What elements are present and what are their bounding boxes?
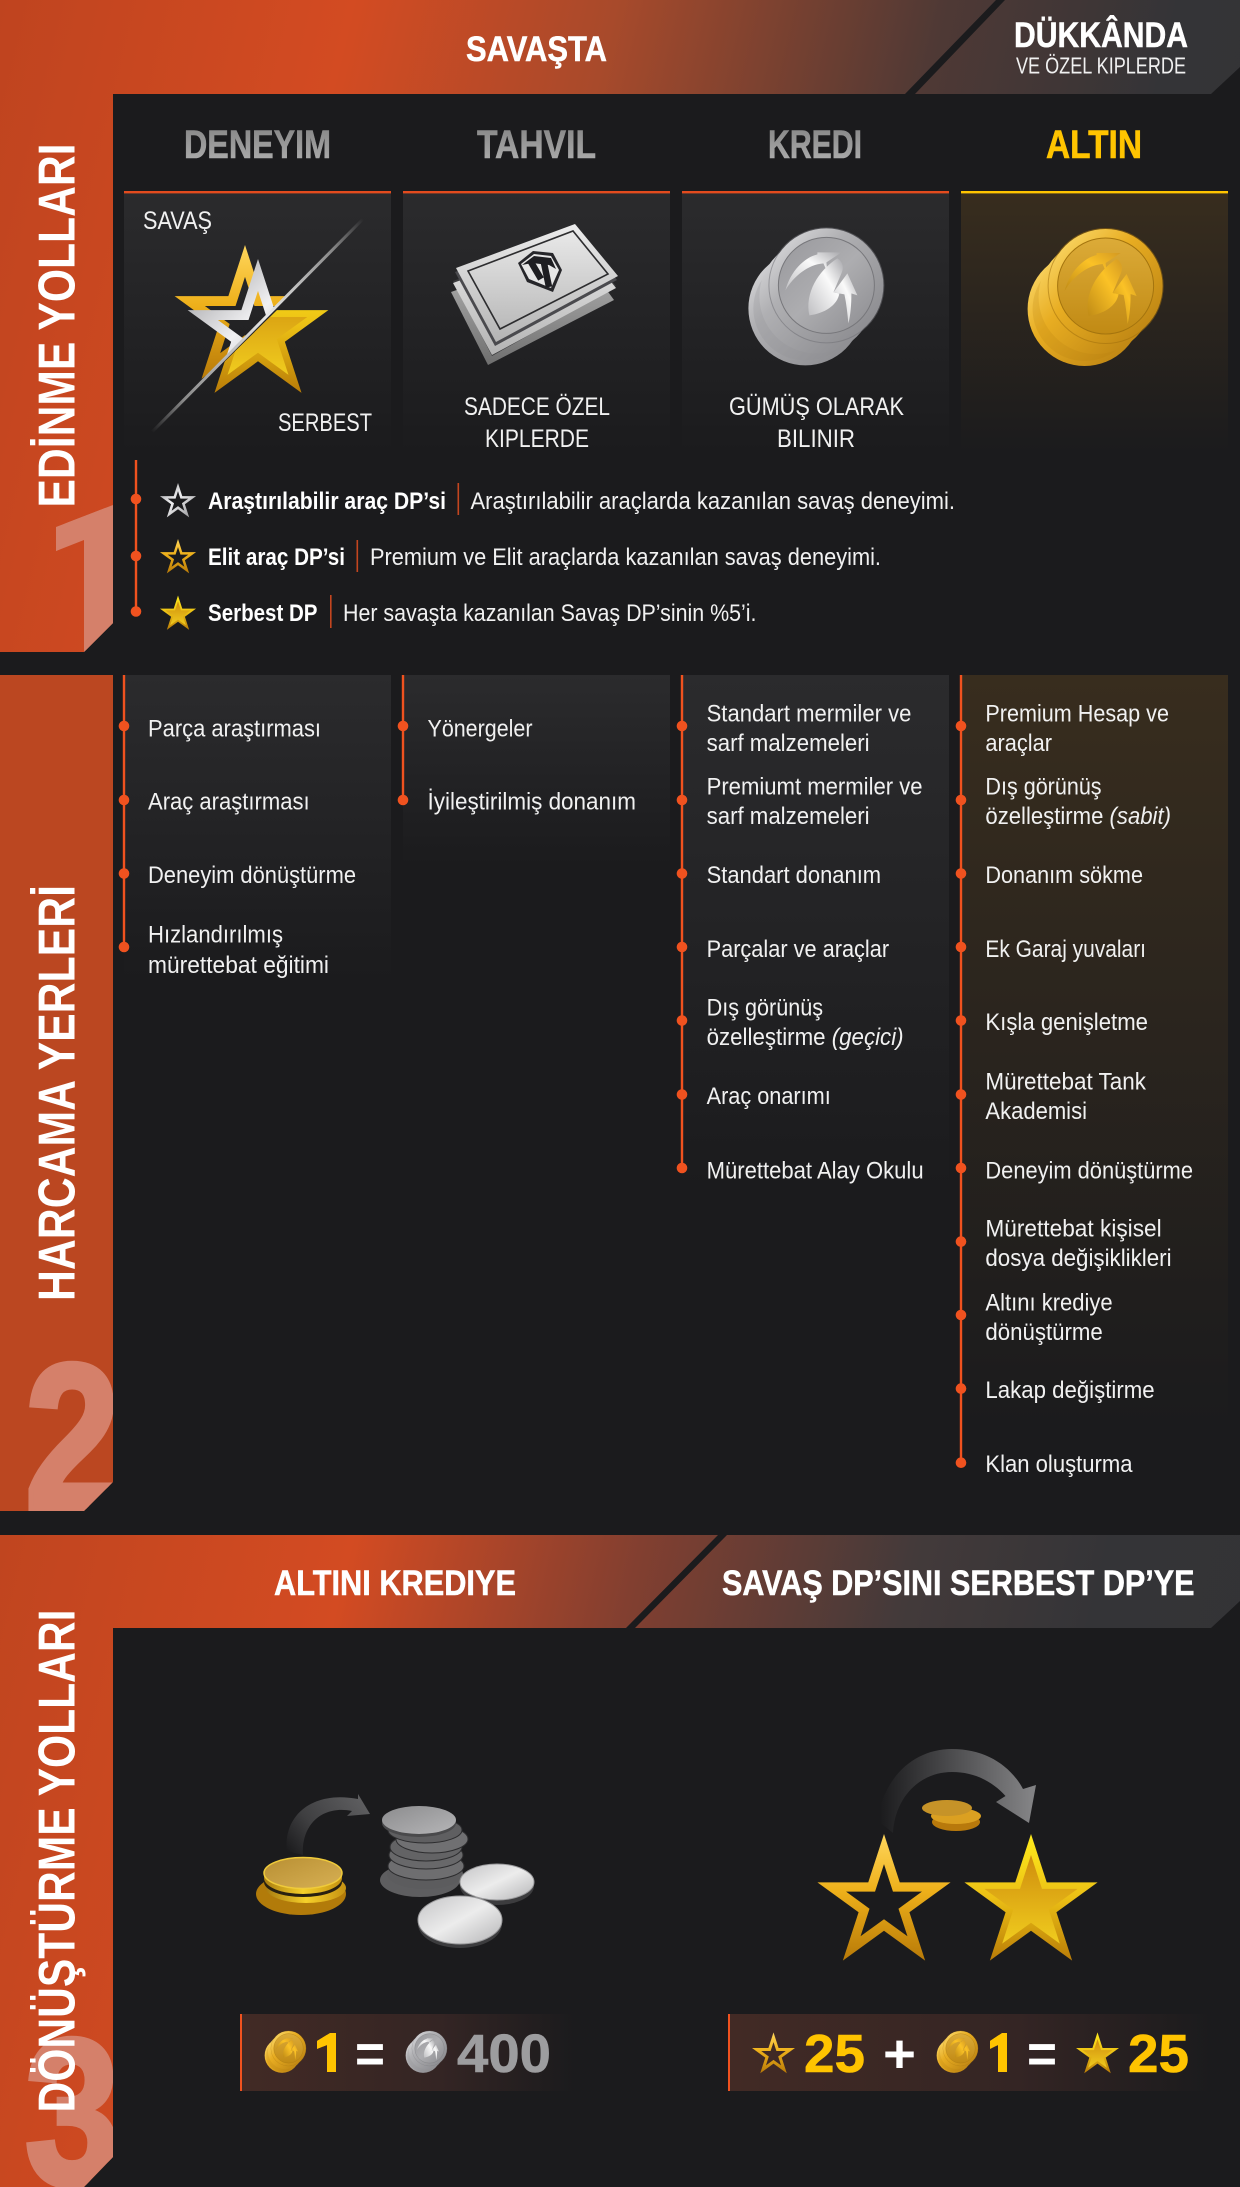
- spending list: altın: Altını krediye: [985, 1290, 1113, 1317]
- spending list: kredi: Mürettebat Alay Okulu: [707, 1158, 924, 1185]
- heading: altını krediye: ALTINI KREDIYE: [274, 1564, 516, 1603]
- formula: 25 xp plus 1 gold equals 25 free xp: =: [1027, 2024, 1057, 2084]
- icon: outline star: [752, 2032, 795, 2073]
- icon: gold outline star: [160, 539, 196, 573]
- section 2: harcama yerleri: [0, 675, 1228, 1554]
- spending list: deneyim: Parça araştırması: [148, 716, 321, 742]
- formula: 25 xp plus 1 gold equals 25 free xp: 25: [804, 2024, 865, 2084]
- heading: dükkânda: DÜKKÂNDA: [1014, 15, 1188, 55]
- section 3: dönüştürme yolları: [0, 1535, 1240, 2187]
- icon: filled star: [1076, 2032, 1119, 2073]
- column heading: kredi: KREDI: [768, 123, 862, 167]
- spending list: altın: Klan oluşturma: [985, 1451, 1133, 1478]
- banner: savaş dp section: [635, 1535, 1240, 1628]
- label: gümüş olarak bilinir: BILINIR: [777, 425, 855, 453]
- legend: experience types: [131, 460, 955, 630]
- legend row 2 description: Premium ve Elit araçlarda kazanılan savaş deneyimi.: [370, 544, 881, 571]
- icon: savaş and serbest star: [152, 219, 363, 432]
- formula: 25 xp plus 1 gold equals 25 free xp: +: [883, 2024, 916, 2084]
- icon: gold coins: [1028, 228, 1164, 366]
- panel: altın: [961, 191, 1228, 452]
- spending list: deneyim: Araç araştırması: [148, 788, 310, 816]
- icon: gold coin: [265, 2031, 306, 2073]
- icon: filled star: [160, 596, 196, 630]
- legend row 3 label: Serbest DP: [208, 600, 318, 627]
- gold coins: [922, 1800, 981, 1831]
- legend row 2 label: Elit araç DP’si: [208, 544, 345, 571]
- label: savaş: SAVAŞ: [143, 207, 212, 235]
- icon: bonds stack: [451, 224, 618, 365]
- formula: 1 gold equals 400 credits: 400: [457, 2024, 551, 2084]
- illustration: gold to silver: [256, 1794, 534, 1948]
- heading: savaşta: SAVAŞTA: [466, 30, 607, 69]
- panel: deneyim: [124, 191, 391, 452]
- label: sadece özel kiplerde: KIPLERDE: [485, 425, 589, 453]
- spending list: kredi: Parçalar ve araçlar: [707, 936, 889, 963]
- label: gümüş olarak bilinir: GÜMÜŞ OLARAK: [729, 393, 904, 421]
- spending list: deneyim: Deneyim dönüştürme: [148, 862, 356, 889]
- spending list: kredi: özelleştirme (geçici): [707, 1024, 904, 1051]
- spending list: altın: Lakap değiştirme: [985, 1377, 1155, 1404]
- side title: HARCAMA YERLERİ: [28, 885, 86, 1301]
- spending list: altın: Premium Hesap ve: [985, 700, 1169, 727]
- icon: filled star: [964, 1834, 1098, 1961]
- spending list: kredi: sarf malzemeleri: [707, 803, 870, 830]
- label: sadece özel kiplerde: [464, 393, 610, 453]
- spending list: altın: dosya değişiklikleri: [985, 1245, 1172, 1272]
- arrow: [877, 1749, 1036, 1833]
- spending list: kredi: sarf malzemeleri: [707, 730, 870, 757]
- spending list: tahvil: Yönergeler: [428, 716, 532, 742]
- side column: [0, 675, 113, 1511]
- spending list: deneyim: [119, 675, 391, 980]
- formula: 1 gold equals 400 credits: [240, 2014, 573, 2091]
- legend row 3 description: Her savaşta kazanılan Savaş DP’sinin %5’i.: [343, 600, 756, 627]
- spending list: altın: Deneyim dönüştürme: [985, 1158, 1193, 1185]
- icon: silver coins: [748, 227, 884, 365]
- legend row 1 label: Araştırılabilir araç DP’si: [208, 488, 446, 515]
- side title: DÖNÜŞTÜRME YOLLARI: [28, 1610, 86, 2112]
- illustration: stars with gold coin: [817, 1749, 1098, 1961]
- spending list: altın: Mürettebat kişisel: [985, 1216, 1162, 1242]
- label: sadece özel kiplerde: SADECE ÖZEL: [464, 393, 610, 421]
- panel: kredi: [682, 191, 949, 453]
- spending list: altın: Akademisi: [985, 1098, 1087, 1125]
- panel: tahvil: [403, 191, 670, 453]
- spending list: kredi: Dış görünüş: [707, 994, 823, 1021]
- spending list: deneyim: Hızlandırılmış: [148, 922, 283, 948]
- spending list: altın: dönüştürme: [985, 1319, 1103, 1346]
- gold coins: [256, 1858, 346, 1915]
- section 1: edinme yolları: [0, 0, 1240, 696]
- spending list: altın: özelleştirme (sabit): [985, 803, 1171, 830]
- spending list: kredi: Standart donanım: [707, 862, 881, 889]
- banner and side column: [0, 1535, 718, 2187]
- column heading: tahvil: TAHVIL: [477, 123, 596, 167]
- number 2: 2: [25, 1322, 120, 1554]
- icon: gold coin: [937, 2031, 978, 2073]
- formula: 25 xp plus 1 gold equals 25 free xp: [728, 2014, 1210, 2091]
- spending list: kredi: Araç onarımı: [707, 1083, 831, 1110]
- label: serbest: SERBEST: [278, 409, 372, 437]
- arrow: [287, 1794, 370, 1855]
- icon: gold outline star: [817, 1834, 951, 1961]
- spending list: tahvil: İyileştirilmiş donanım: [428, 788, 636, 816]
- spending list: deneyim: mürettebat eğitimi: [148, 952, 329, 979]
- banner and side column: [0, 0, 996, 652]
- formula: 1 gold equals 400 credits: 1: [305, 2024, 349, 2084]
- number 1: 1: [38, 464, 158, 696]
- spending list: tahvil: [398, 675, 670, 865]
- label: gümüş olarak bilinir: [729, 393, 904, 453]
- side title: EDİNME YOLLARI: [28, 144, 86, 508]
- spending list: altın: Ek Garaj yuvaları: [985, 936, 1146, 963]
- column heading: altın: ALTIN: [1046, 123, 1142, 167]
- spending list: kredi: [677, 675, 949, 1190]
- spending list: altın: Donanım sökme: [985, 862, 1143, 889]
- banner: dükkânda section: [915, 0, 1240, 94]
- silver coins: [380, 1806, 534, 1948]
- spending list: altın: Kışla genişletme: [985, 1009, 1148, 1036]
- spending list: altın: Mürettebat Tank: [985, 1068, 1147, 1096]
- subheading: ve özel kiplerde: VE ÖZEL KIPLERDE: [1016, 52, 1186, 78]
- spending list: altın: Dış görünüş: [985, 773, 1102, 800]
- formula: 1 gold equals 400 credits: =: [355, 2024, 385, 2084]
- icon: silver coin: [406, 2031, 447, 2073]
- icon: silver star: [160, 483, 196, 517]
- spending list: altın: araçlar: [985, 730, 1052, 757]
- spending list: kredi: Premiumt mermiler ve: [707, 773, 923, 800]
- column heading: deneyim: DENEYIM: [184, 123, 331, 167]
- legend row 1 description: Araştırılabilir araçlarda kazanılan savaş deneyimi.: [470, 488, 955, 515]
- spending list: kredi: Standart mermiler ve: [707, 700, 911, 727]
- formula: 25 xp plus 1 gold equals 25 free xp: 25: [1128, 2024, 1189, 2084]
- formula: 25 xp plus 1 gold equals 25 free xp: 1: [978, 2024, 1022, 2084]
- spending list: altın: [956, 675, 1228, 1478]
